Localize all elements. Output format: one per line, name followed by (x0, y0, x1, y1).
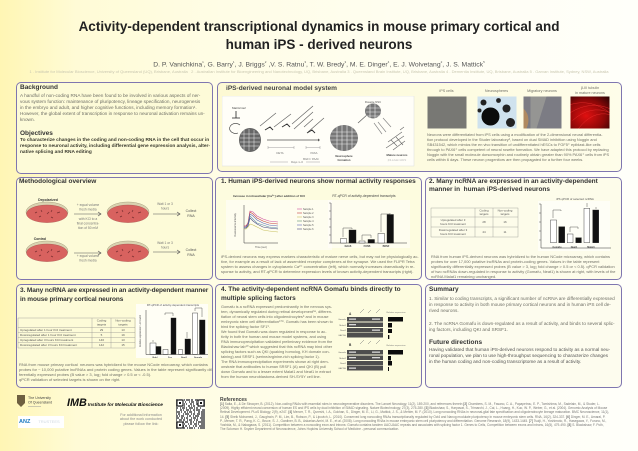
diagram: culture treatments: final concentra- (77, 222, 99, 226)
text: neuron differentiation: through to PAX6⁺ cells competent of neural rosette formation. We have adapted this protocol by replacing (427, 147, 609, 152)
logo: University of Queensland: The University (28, 396, 51, 400)
logo: ANZ Trustees (18, 416, 64, 428)
table: human expression: Downregulated after 3 (439, 228, 468, 232)
chart: mouse qPCR: RT-qPCR of activity-dependent transcripts (147, 303, 200, 307)
diagram: neural differentiation: Matrix/ns2 (232, 106, 246, 110)
table: human expression: 44 (482, 230, 486, 234)
diagram: neural differentiation: Neurosphere (335, 154, 353, 158)
text: background: known. (20, 117, 35, 122)
diagram: culture treatments: tion of 50 mM (78, 226, 98, 230)
chart: human qPCR: Malat1 (587, 246, 595, 249)
table: human expression: Coding (479, 208, 489, 212)
figure: RNA immunoprecipitation gels: Relative expression (386, 344, 406, 347)
text: summary: in response to activity in both mouse primary cortical neurons and in human iPS cell de- (429, 302, 611, 307)
chart: mouse qPCR: Gomafu (194, 357, 203, 359)
diagram: culture treatments: with KCl to a (79, 217, 97, 221)
text: panel 2: significantly differentially expressed probes (B value > 3, log₂ fold change > 0.5 or < 0.5). qPCR validation (431, 264, 615, 269)
text: panel 4: from the human neuroblastoma-derived SH-SY5Y cell line. (221, 374, 321, 378)
text: summary: 2. The ncRNA Gomafu is down-regulated as a result of activity, and binds to several splic- (429, 321, 615, 326)
chart legend: Sample 4 (303, 220, 314, 223)
figure: RNA immunoprecipitation gels: GAPDH (338, 334, 346, 337)
table: mouse expression: targets (97, 322, 107, 326)
text: references (220, 402, 609, 431)
chart legend: Sample 2 (303, 212, 314, 215)
chart: calcium influx: NAAS (345, 245, 352, 248)
text: background: vous system function: maintenance of pluripotency, lineage specification, neurogenesis (20, 99, 200, 104)
text: summary: rived neurons. (429, 308, 459, 313)
text: panel 3: qPCR validation of selected targets is shown on the right. (19, 377, 120, 382)
chart: calcium influx: Increase in intracellular [Ca²⁺] after addition of KCl (233, 194, 305, 198)
table: human expression: Upregulated after 3 (441, 218, 466, 222)
table: mouse expression: 13 (121, 338, 125, 342)
logo: IMB: IMBInstitute for Molecular Bioscience (67, 397, 163, 409)
text: panel 4: splicing factors such as QKI (quaking homolog, KH domain con- (221, 350, 330, 354)
references (220, 397, 609, 431)
table: mouse expression (18, 303, 208, 359)
table: human expression: targets (501, 212, 510, 216)
diagram: neural differentiation: BGFI / PAAh (303, 157, 319, 161)
panel: background (16, 82, 213, 174)
figure: RNA immunoprecipitation gels: Gomafu (338, 319, 347, 321)
figure: RNA immunoprecipitation gels: B (349, 343, 352, 347)
chart: calcium influx: Time (sec) (255, 246, 267, 249)
heading: future directions: Future directions (429, 339, 482, 346)
text: panel 2: RNA from human iPS-derived neurons was hybridized to the human NCode microarray, which contains (431, 254, 610, 259)
diagram: neural differentiation: Mature neurons (387, 153, 408, 157)
chart: mouse qPCR: Neat1 (181, 356, 188, 359)
text: objectives: To characterize changes in the coding and non-coding RNA in the cell that occur in (20, 138, 209, 143)
text: panel 3: probes for ~ 10,000 putative lncRNAs and protein coding genes. Values in the table represent significantly dif- (19, 367, 213, 372)
text: neuron differentiation (427, 132, 609, 162)
chart: mouse qPCR: Relative expression / ∆Ct actin (139, 314, 142, 347)
chart legend: Sample 1 (303, 208, 314, 211)
chart: human qPCR (538, 197, 611, 251)
table: human expression: 16 (503, 220, 507, 224)
logo: University of Queensland: Of Queensland (28, 400, 52, 404)
panel: ncRNA in human iPS neurons (425, 177, 622, 280)
figure: RNA immunoprecipitation gels: GAPDH (338, 367, 346, 370)
text: panel 4: down Gomafu and to a lesser extent Malat1 and Neat1 in extract (221, 370, 331, 374)
chart: mouse qPCR (136, 303, 208, 359)
chart: calcium influx: FOSB (364, 245, 371, 248)
heading: panel 4 (221, 286, 401, 302)
text: references: (2009). Highly efficient neural conversion of human ES and iPS cells by dual inhibition of SMAD signaling. Nature Biotechnology, 27(3), 275-280. [3] Blackshaw, S., Harpavat, S., Trimarchi, J., Cai, L., Huang, H., Kuo, W. P., Weber, G., et al. (2004). Genomic Analysis of Mouse (220, 406, 607, 410)
text: panel 4: onstrate that antibodies to human SRSF1 (A) and QKI (B) pull (221, 364, 326, 368)
photo captions: iPS cells (439, 89, 454, 93)
text: panel 2: ncRNA Malat1 remaining unchanged. (431, 274, 496, 279)
diagram: culture treatments: Collect (186, 248, 196, 252)
table: human expression (430, 197, 611, 251)
table: mouse expression: targets (118, 322, 128, 326)
text: neuron differentiation: tion protocol developed in the Studer laboratory², based on dual SMAD inhibition using Noggin and (427, 137, 597, 142)
heading: panel 3: in mouse primary cortical neurons (20, 296, 123, 303)
title: Activity-dependent transcriptional dynamics in mouse primary cortical and (79, 18, 559, 34)
diagram: culture treatments: hours (161, 206, 169, 210)
panel: ncRNA in mouse neurons (16, 284, 213, 388)
text: references: The Solomon H. Snyder Department of Neuroscience, Johns Hopkins University School of Medicine - personal communication. (220, 427, 399, 431)
table: mouse expression: 142 (99, 343, 104, 347)
table: human expression: 28 (482, 220, 486, 224)
text: panel 1: sponse to activity, and RT-qPCR to determine expression levels of known activity-dependent transcripts (right). (221, 268, 413, 274)
text: panel 4: bind the splicing factor SF1⁹. (221, 324, 270, 328)
text: future directions: in the human coding and non-coding transcriptome as a result of activity. (429, 360, 581, 365)
heading: panel 1: 1. Human iPS-derived neurons show normal activity responses (221, 178, 416, 185)
heading: summary: Summary (429, 286, 459, 293)
text: additional information: about the work conducted (120, 417, 162, 421)
text: panel 4: tiation of neural stem cells into oligodendrocytes⁵ and in mouse (221, 314, 329, 318)
text: objectives (20, 138, 210, 155)
chart: calcium influx (226, 194, 410, 250)
table: human expression: targets (480, 212, 489, 216)
affiliations: 1 . Institute for Molecular Bioscience, University of Queensland (UQ), Brisbane, Australia 2 . Australian Institute for Bioengineering and Nanotechnology, UQ, Brisbane, Australia 3 . Queensland Brain Institute, UQ, Brisbane, Australia 4 . Dementia Institute, UQ, Brisbane, Australia 5 . Garvan Institute, Sydney, NSW, Australia (29, 69, 609, 74)
text: additional information: please follow the link: (123, 422, 159, 426)
photos (428, 96, 610, 128)
title: human iPS - derived neurons (226, 36, 412, 52)
diagram: neural differentiation: Days 1–6 (291, 160, 303, 164)
text: references: P., Mercer, T. R., Pang, K. C., Bruce, S. J., Gardiner, B. B., Askarian-Amiri, M. E., et al. (2008). Long noncoding RNAs in mouse embryonic stem cell pluripotency and differentiation. Genome Research, 18(9), 1433-1445. [7] Tsuiji, H., Yoshimoto, R., Hasegawa, Y., Furuno, M., (220, 419, 606, 423)
text: background: A handful of non-coding RNA have been found to be involved in various aspects of ner- (20, 93, 200, 98)
text: panel 3 (19, 362, 213, 382)
icon: QR code (176, 399, 205, 429)
diagram: culture treatments: hours (161, 246, 169, 250)
text: objectives: native splicing and RNA editing (20, 150, 92, 155)
table: human expression: hours KCl treatment (440, 232, 466, 236)
text: future directions (429, 348, 610, 365)
text: neuron differentiation: Neurons were differentiated from iPS cells using a modification of the 2-dimensional neural differentia- (427, 132, 602, 137)
logo: University of Queensland (17, 395, 52, 407)
diagram: culture treatments: + equal volume (77, 254, 99, 258)
text: panel 4: Gomafu is a ncRNA expressed predominantly in the nervous sys- (221, 304, 332, 308)
panel: iPS-derived neuronal model system: in mature neurons (575, 91, 605, 95)
text: panel 2: of two ncRNAs down-regulated in response to activity (Gomafu, Neat1) is shown at right, with levels of the (431, 269, 616, 274)
diagram: neural differentiation: Rosette NSC (365, 100, 381, 104)
chart: mouse qPCR: Bdnf (153, 357, 158, 359)
table: mouse expression: Downregulated after 3 hours KCl treatment (20, 343, 77, 347)
heading: methodological: Methodological overview (19, 178, 96, 185)
text: background: in the embryo and adult, and higher cognitive functions, including memory formation¹. (20, 105, 197, 110)
diagram: neural differentiation: PA6A (311, 151, 318, 155)
diagram: culture treatments: Wait 1 or 3 (157, 202, 173, 206)
chart legend: Sample 6 (303, 228, 314, 231)
text: additional information: For additional information (120, 413, 162, 417)
diagram: culture treatments: fresh media (79, 208, 97, 212)
diagram: culture treatments: Depolarized (38, 198, 58, 202)
text: panel 1: iPS-derived neurons may express markers characteristic of mature nerve cells, but may not be physiologically ac- (221, 254, 419, 258)
text: summary (429, 296, 615, 332)
diagram: culture treatments: RNA (187, 253, 195, 257)
diagram: culture treatments: Control (34, 237, 46, 241)
heading: objectives: Objectives (20, 130, 53, 136)
logo: ANZ Trustees: ANZ TRUSTEES (19, 419, 60, 425)
text: panel 2: probes for over 17,000 putative lncRNAs and protein-coding genes. Values in the table represent (431, 259, 599, 264)
text: panel 4: Blackshaw lab¹⁰ which suggested that this ncRNA may bind other (221, 344, 332, 348)
figure: RNA immunoprecipitation gels: Malat1 (339, 324, 347, 327)
text: panel 1 (221, 254, 419, 274)
text: background (20, 93, 205, 122)
panel: methodological overview (16, 177, 213, 280)
text: panel 4: tivity in both the human and mouse model systems, and using (221, 334, 326, 338)
text: summary: ing factors, including QKI and SRSF1. (429, 327, 508, 332)
chart: human qPCR: Neat1 (571, 246, 578, 249)
text: background: However, the global extent of transcription in response to neuronal activation remains un- (20, 111, 205, 116)
text: future directions: Having validated that human iPS-derived neurons respond to activity as a normal neu- (429, 348, 610, 352)
text: neuron differentiation: cells within 6 days. These neuron progenitors are then propagated for a further four weeks. (427, 157, 583, 162)
table: mouse expression: 5 (101, 333, 103, 337)
heading: panel 3: 3. Many ncRNA are expressed in an activity-dependent manner (20, 287, 208, 294)
table: human expression: Non-coding (498, 208, 513, 212)
text: panel 4: RNA immunoprecipitation validated preliminary evidence from the (221, 340, 332, 344)
title (79, 18, 559, 52)
text: future directions: ronal population, we plan to use high-throughput sequencing to characterize changes (429, 354, 608, 359)
text: panel 4 (221, 304, 333, 378)
text: references: Retinal Development. PLoS Biology, 2(9), e247. [4] Mercer, T. R., Qureshi, I. A., Gokhan, S., Dinger, M. E., Li, G., Mattick, J. S., & Mehler, M. F. (2010). Long noncoding RNAs in neuronal-glial fate specification and oligodendrocyte lineage maturation. BMC Neuroscience, 11(1), (220, 410, 609, 414)
text: panel 2 (431, 254, 616, 279)
text: panel 4: embryonic stem cell differentiation⁶⁷⁸. Gomafu has been shown to (221, 320, 333, 324)
diagram: culture treatments: RNA (187, 214, 195, 218)
table: mouse expression: Non-coding (115, 318, 131, 322)
bars: enrichment (388, 317, 403, 371)
text: summary: 1. Similar to coding transcripts, a significant number of ncRNA are differentially expressed (429, 296, 615, 300)
diagram: culture treatments: Collect (186, 209, 196, 213)
diagram: neural differentiation: βIII-tubulin MAP2 (388, 159, 407, 162)
heading: iPS model: iPS-derived neuronal model system (226, 85, 337, 92)
table: mouse expression: Coding (97, 318, 107, 322)
figure: RNA immunoprecipitation gels: Relative expression (386, 311, 406, 314)
text: neuron differentiation: SB431542, which mimics the en vivo transition of undifferentiated hESCs to FGF5⁺ epiblast-like cells (427, 142, 600, 147)
figure: RNA immunoprecipitation gels: Gomafu (338, 352, 347, 354)
panel: summary and future directions (425, 284, 622, 388)
text: panel 4: We found that Gomafu was down regulated in response to ac- (221, 330, 326, 334)
chart: calcium influx: Fluorescence intensity (234, 212, 237, 237)
chart legend: Sample 3 (303, 216, 314, 219)
heading: panel 3 (20, 287, 208, 303)
table: mouse expression: 146 (99, 338, 104, 342)
diagram: culture treatments: Wait 1 or 3 (157, 241, 173, 245)
table: mouse expression: 13 (121, 328, 125, 332)
table: human expression: 11 (503, 230, 507, 234)
text: panel 4: taining) and SRSF1 (serine/arginine-rich splicing factor 1). (221, 354, 320, 358)
table: mouse expression: Downregulated after 1 hour KCl treatment (20, 333, 76, 337)
diagram: neural differentiation: DETA (276, 151, 284, 155)
panel: Gomafu binds splicing factors (215, 284, 422, 388)
text: panel 4: tem, dynamically regulated during retinal development³⁴, differen- (221, 310, 332, 314)
text: references: [1] Salta, E., & De Strooper, B. (2012). Non-coding RNAs with essential roles in neurodegenerative disorders. The Lancet Neurology, 11(2), 189-200, and references therein [2] Chambers, S. M., Fasano, C. A., Papapetrou, E. P., Tomishima, M., Sadelain, M., & Studer, L. (220, 402, 600, 406)
chart: human qPCR: iPS qPCR of selected ncRNA (556, 197, 594, 201)
table: mouse expression: 15 (121, 343, 125, 347)
figure: RNA immunoprecipitation gels: A (349, 312, 352, 316)
text: neuron differentiation: Noggin with the small molecule dorsomorphin and routinely obtain greater than 90% PAX6⁺ cells from iPS (427, 152, 609, 157)
heading: panel 4: 4. The activity-dependent ncRNA Gomafu binds directly to (221, 286, 401, 293)
chart: mouse qPCR: Fos (168, 357, 173, 359)
table: mouse expression: 19 (121, 333, 125, 337)
chart: calcium influx: RT-qPCR of activity-dependent transcripts (332, 194, 396, 198)
table: human expression: hours KCl treatment (440, 222, 466, 226)
text: additional information (120, 413, 162, 426)
panel: iPS-derived neuronal model system: Neurospheres (485, 89, 508, 93)
chart legend: Sample 5 (303, 224, 314, 227)
chart legend (297, 208, 314, 231)
table: mouse expression: Upregulated after 3 hours KCl treatment (20, 338, 73, 342)
figure: RNA immunoprecipitation gels (338, 309, 406, 371)
heading: background: Background (20, 84, 58, 91)
diagram: culture treatments: + equal volume (77, 203, 99, 207)
text: panel 3: RNA from mouse primary cortical neurons was hybridized to the mouse NCode microarray, which contains (19, 362, 208, 366)
panel: iPS-derived neuronal model system: β-III tubulin (581, 86, 599, 90)
figure: RNA immunoprecipitation gels: Neat1 (340, 362, 347, 365)
chart: human qPCR: Gomafu (552, 246, 562, 249)
text: references: Yoshida, M., & Nakagawa, S. (2011). Competition between a noncoding exon and introns: Gomafu contains tandem UACUAAC repeats and associates with splicing factor 1. Genes to Cells, Competition between exons and introns, 16(5), 479-490. [8] S. Blackshaw, F. Polh, (220, 423, 604, 427)
diagram: culture treatments: fresh media (79, 258, 97, 262)
text: references: 14. [5] Sheik Mohamed, J., Gaughwin, P. M., Lim, B., Robson, P., & Lipovich, L. (2010). Conserved long noncoding RNAs transcriptionally regulated by Oct4 and Nanog modulate pluripotency in mouse embryonic stem cells. RNA, 16(2), 324-337. [6] Dinger, M. E., Amaral, P. (220, 415, 605, 419)
text: panel 3: ferentially expressed probes (B value > 3, log₂ fold change > 0.5 or < -0.5). (19, 372, 151, 377)
text: objectives: response to neuronal activity, including differential gene expression analysis, alter- (20, 144, 210, 149)
heading: panel 2 (429, 178, 598, 193)
diagram: neural differentiation: formation (338, 158, 351, 162)
heading: panel 4: multiple splicing factors (221, 295, 296, 302)
table: mouse expression: Upregulated after 1 hour KCl treatment (20, 328, 72, 332)
chart: calcium influx: BDNF (383, 245, 390, 248)
authors: D. P. Vanichkina1, G. Barry1, J. Briggs2 ,V. S. Ratnu3, T. W. Bredy3, M. E. Dinger4, E. J. Wolvetang2, J. S. Mattick5 (153, 60, 485, 68)
text: panel 1: system to assess changes in cytoplasmic Ca²⁺ concentration (left), which normally increases dramatically in re- (221, 264, 415, 268)
panel: iPS-derived neuronal model system (217, 82, 622, 172)
heading: panel 2: manner in human iPS-derived neurons (429, 186, 550, 193)
heading: panel 2: 2. Many ncRNA are expressed in an activity-dependent (429, 178, 598, 185)
text: panel 1: tive, for example as a result of lack of assembled receptor complexes at the synapse. We used the FLIPR Tetra (221, 258, 415, 264)
diagram: culture treatments (26, 198, 196, 262)
table: mouse expression: 29 (100, 328, 103, 332)
text: panel 4: The RNA immunoprecipitation experiments shown at right dem- (221, 360, 329, 364)
heading: references: References (220, 397, 247, 403)
diagram: neural differentiation (222, 96, 414, 166)
figure: RNA immunoprecipitation gels: Neat1 (340, 329, 347, 332)
panel: iPS-derived neuronal model system: Migratory neurons (527, 89, 557, 93)
panel: normal activity responses (215, 177, 422, 280)
figure: RNA immunoprecipitation gels: Malat1 (339, 357, 347, 360)
